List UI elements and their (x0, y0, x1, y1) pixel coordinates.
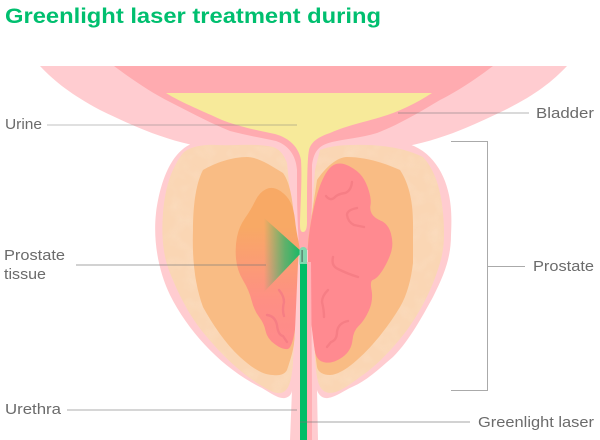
urine (166, 93, 432, 232)
label: prostate tissue: Prostate (4, 247, 65, 264)
label: prostate tissue (4, 247, 266, 283)
label: prostate with bracket: Prostate (533, 258, 594, 275)
prostate capsule tissue (155, 140, 450, 400)
tissue veins (267, 182, 364, 347)
label: greenlight laser: Greenlight laser (478, 414, 594, 431)
urethra inner wall (307, 262, 312, 440)
bladder and prostate illustration (40, 66, 567, 440)
prostate outer capsule (155, 142, 451, 440)
label: prostate with bracket (451, 142, 594, 390)
label: prostate tissue: tissue (4, 266, 46, 283)
title: Greenlight laser treatment during (5, 5, 381, 28)
label: urethra: Urethra (5, 401, 62, 418)
bladder outer wall (40, 66, 567, 146)
right enlarged tissue (309, 165, 391, 361)
label: urine: Urine (5, 116, 42, 133)
left enlarged tissue (237, 189, 299, 348)
greenlight laser fibre (300, 264, 307, 440)
laser emitter mark (302, 250, 303, 262)
right prostate lobe (308, 157, 413, 375)
left prostate lobe (193, 157, 298, 375)
urethra (293, 250, 312, 440)
label: bladder: Bladder (536, 105, 594, 122)
bladder muscle layer (114, 66, 493, 250)
laser fibre tip (300, 247, 307, 267)
laser cone (263, 217, 302, 293)
